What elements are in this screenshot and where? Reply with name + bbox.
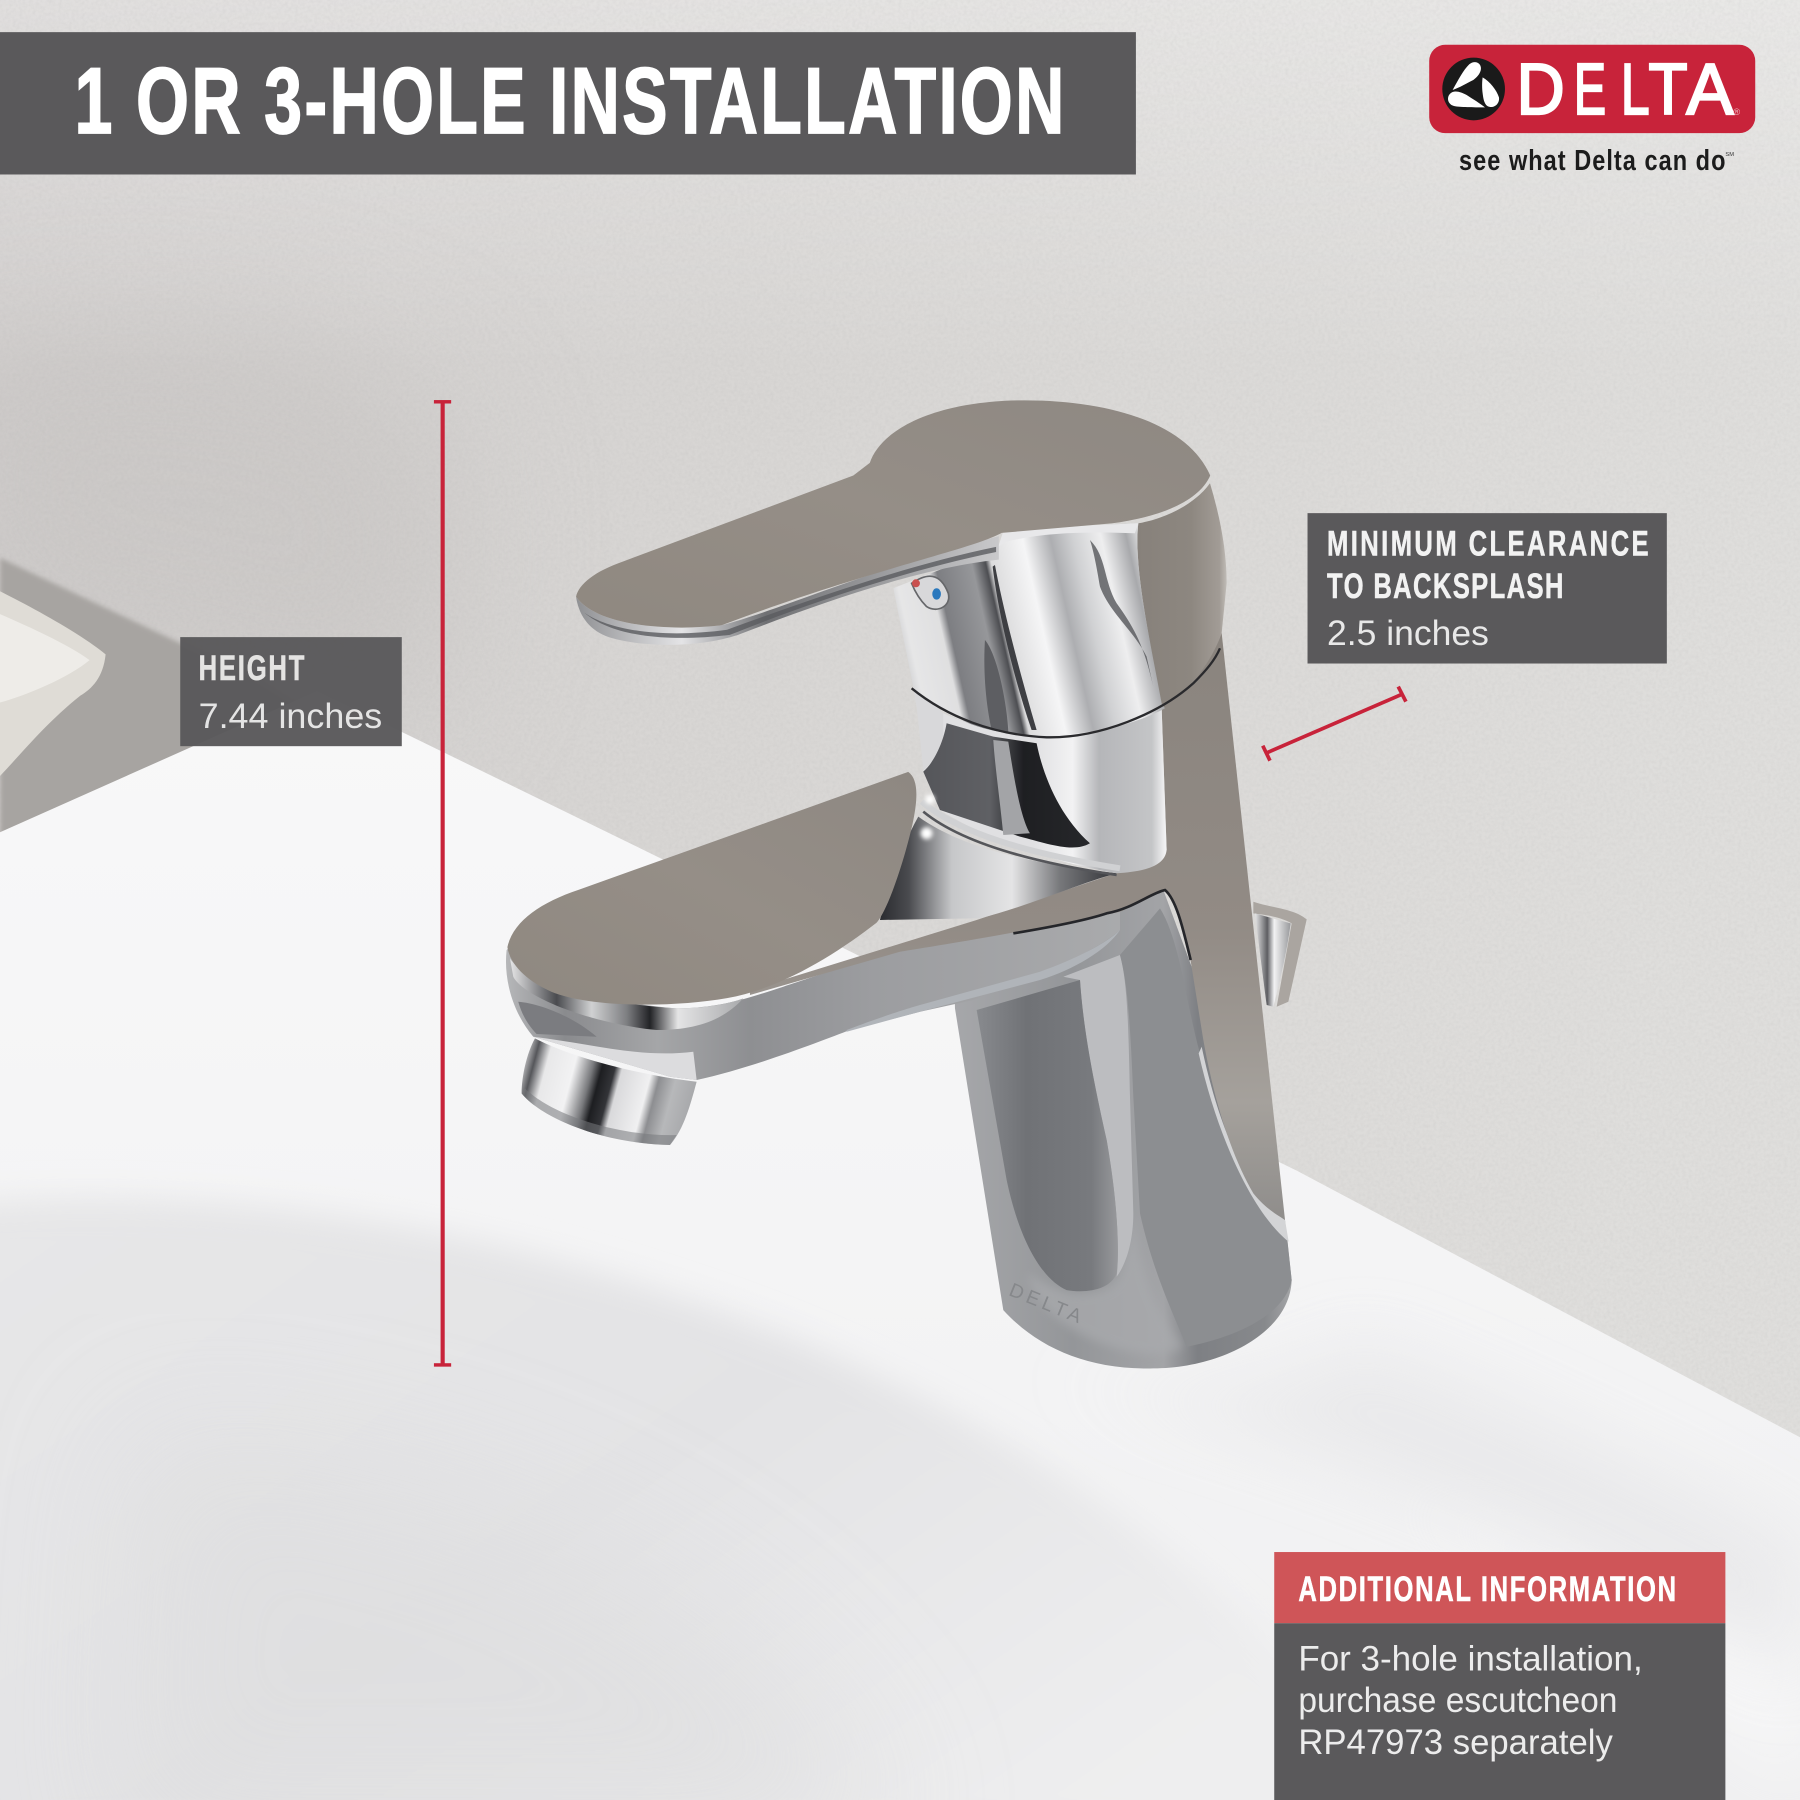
spout rim band bbox=[510, 958, 743, 1030]
background: white sink deck bbox=[0, 691, 1800, 1800]
handle gap line bbox=[912, 648, 1220, 737]
registered mark: ® bbox=[1733, 107, 1740, 117]
body bright edge bbox=[1199, 1047, 1289, 1242]
spout lower highlight bbox=[533, 1037, 697, 1080]
handle chrome bbox=[893, 523, 1165, 735]
clearance dimension line bbox=[1263, 687, 1406, 761]
body right shade bbox=[1120, 908, 1292, 1347]
neck slit bbox=[993, 740, 1030, 835]
logo wordmark bbox=[1516, 50, 1734, 130]
panel text: For 3-hole installation, bbox=[1298, 1638, 1643, 1678]
handle top lip bbox=[998, 523, 1138, 547]
panel body bbox=[1274, 1623, 1725, 1800]
height label: HEIGHT bbox=[199, 648, 304, 688]
faucet bbox=[506, 400, 1307, 1368]
faucet: lever bbox=[576, 400, 1210, 645]
hot and cold indicator bbox=[912, 576, 949, 609]
height dimension line bbox=[434, 400, 451, 1367]
handle dark edge bbox=[993, 565, 1037, 730]
spout blue strip bbox=[847, 930, 1120, 1032]
panel text: purchase escutcheon bbox=[1298, 1680, 1617, 1720]
panel text: RP47973 separately bbox=[1298, 1722, 1613, 1762]
collar rings bbox=[922, 802, 1120, 868]
callout: height bbox=[180, 637, 402, 746]
faucet: spout bbox=[506, 900, 1120, 1080]
faucet base brand mark: DELTA bbox=[1006, 1279, 1085, 1328]
panel heading: ADDITIONAL INFORMATION bbox=[1298, 1569, 1676, 1609]
neck dark reflection bbox=[923, 723, 1090, 848]
neck left chrome bbox=[913, 687, 943, 770]
logo badge bbox=[1429, 45, 1755, 133]
Delta logo bbox=[1429, 45, 1755, 176]
faucet: aerator bbox=[522, 1038, 697, 1145]
background: sink basin shading bbox=[0, 1198, 1800, 1800]
panel: additional information bbox=[1274, 1552, 1725, 1800]
height value: 7.44 inches bbox=[199, 696, 382, 736]
body silhouette bbox=[953, 890, 1292, 1368]
faucet: taupe reflection column and spout band bbox=[750, 633, 1285, 1220]
star highlights bbox=[925, 795, 935, 804]
logo wordmark: D bbox=[1516, 50, 1565, 130]
handle slit bbox=[984, 640, 1008, 732]
tagline: see what Delta can do bbox=[1459, 144, 1725, 176]
logo wordmark: T bbox=[1648, 50, 1688, 130]
faucet: spout top surface bbox=[507, 772, 916, 1005]
body lower sheen bbox=[1027, 1213, 1183, 1354]
logo emblem bbox=[1442, 58, 1505, 120]
faucet: neck cone bbox=[880, 817, 1117, 920]
faucet: lower body bbox=[953, 890, 1292, 1368]
logo wordmark: L bbox=[1621, 50, 1650, 130]
clearance label: MINIMUM CLEARANCE bbox=[1327, 523, 1649, 564]
lever top surface bbox=[576, 400, 1210, 628]
lever shadow line bbox=[584, 547, 996, 638]
body light column bbox=[1063, 955, 1133, 1277]
lever rim bbox=[576, 536, 999, 645]
logo wordmark: E bbox=[1574, 50, 1606, 130]
clearance label: TO BACKSPLASH bbox=[1327, 566, 1563, 606]
logo wordmark: A bbox=[1686, 50, 1734, 130]
taupe column bbox=[750, 633, 1285, 1220]
body inner reflection bbox=[977, 980, 1118, 1291]
title text: 1 OR 3-HOLE INSTALLATION bbox=[75, 50, 1064, 154]
background: shelf and soap dish bbox=[0, 558, 344, 849]
spout side bbox=[506, 900, 1120, 1080]
neck silhouette bbox=[913, 687, 1167, 873]
clearance value: 2.5 inches bbox=[1327, 613, 1489, 653]
clearance label bbox=[1327, 523, 1649, 606]
spout shadow patch bbox=[518, 1002, 597, 1037]
panel header bbox=[1274, 1552, 1725, 1623]
callout: minimum clearance bbox=[1308, 513, 1667, 664]
faucet: pop-up drain rod bbox=[1253, 902, 1307, 1007]
title banner bbox=[0, 32, 1136, 174]
faucet: neck and handle bbox=[893, 483, 1227, 875]
cap side bbox=[1137, 483, 1227, 708]
dark arch line bbox=[1013, 890, 1191, 960]
service mark: SM bbox=[1725, 152, 1734, 158]
